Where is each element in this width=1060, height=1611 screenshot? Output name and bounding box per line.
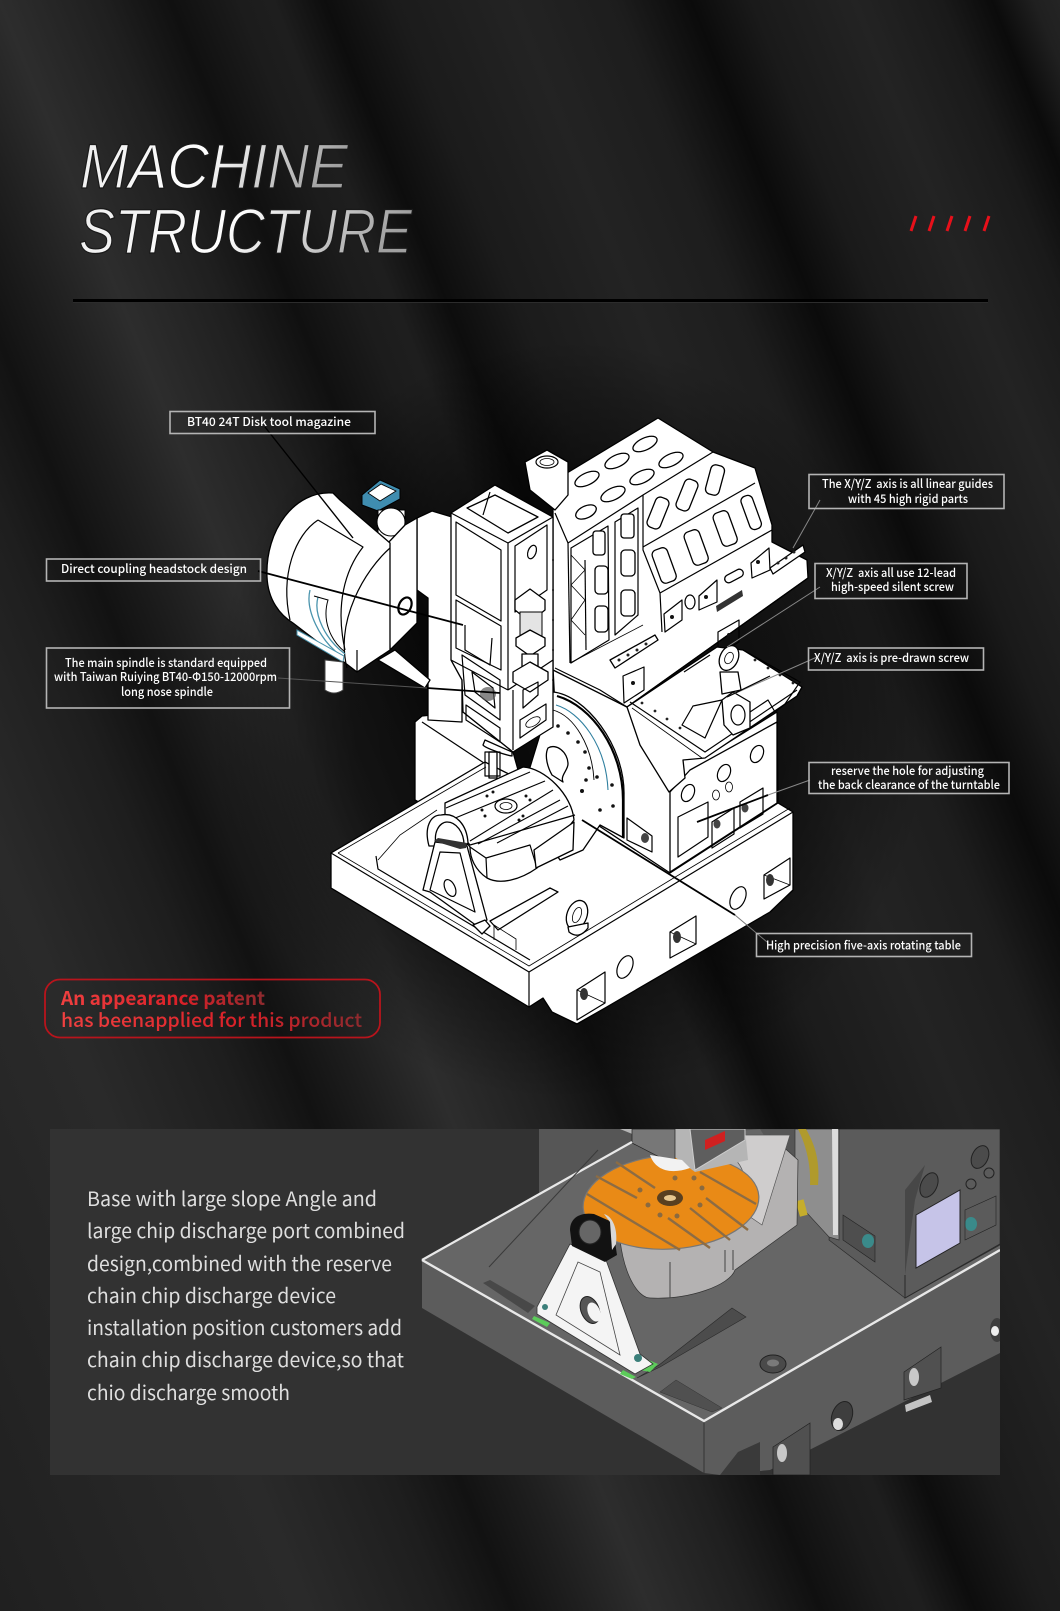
label: headstock: Direct coupling headstock design [61, 560, 247, 577]
lower front bed and motor bracket [627, 642, 802, 792]
green bolts [542, 1304, 548, 1310]
tailstock head [570, 1214, 617, 1262]
panel: base chip discharge [50, 1129, 1004, 1475]
icon: red slashes [911, 216, 989, 231]
purple access plate [916, 1190, 960, 1268]
panel CAD render [422, 1129, 1004, 1475]
patent callout [45, 980, 380, 1038]
label: rotating table: High precision five-axis rotating table [766, 936, 961, 954]
tray floor [422, 1129, 1000, 1420]
spindle tip [483, 740, 512, 778]
label: main spindle [46, 648, 290, 708]
machine line drawing [258, 418, 820, 1024]
rear wall [539, 1129, 829, 1238]
leader lines [258, 427, 820, 942]
panel text: chain chip discharge device [87, 1280, 336, 1309]
magazine motor [362, 480, 400, 511]
floor puck [760, 1355, 786, 1373]
guide rod [325, 660, 343, 693]
panel text: large chip discharge port combined [87, 1215, 405, 1244]
panel text: chain chip discharge device,so that [87, 1344, 404, 1373]
pockets and holes [577, 972, 605, 1020]
linear guide segments [610, 545, 805, 668]
tailstock support [423, 815, 490, 934]
back pedestal [829, 1129, 1000, 1298]
top slots [573, 433, 685, 522]
patent callout: has beenapplied for this product [61, 1006, 362, 1033]
upright disc back [795, 1129, 839, 1240]
label: rotating table [756, 934, 972, 956]
side housing behind column [417, 511, 462, 722]
label: silent screw [815, 564, 967, 598]
title: STRUCTURE [79, 197, 413, 267]
label: main spindle: with Taiwan Ruiying BT40-Φ150-12000rpm [54, 668, 277, 685]
label: linear guides [809, 474, 1004, 508]
label: main spindle: The main spindle is standard equipped [65, 654, 267, 671]
rear bed block [553, 668, 778, 873]
orange table [582, 1156, 760, 1250]
machine column [451, 450, 568, 752]
ribbed side panels [571, 508, 638, 663]
tool magazine [267, 480, 430, 693]
base tray [331, 762, 793, 1024]
label: main spindle: long nose spindle [121, 683, 213, 700]
chip ramp [637, 1308, 746, 1378]
title divider [73, 299, 988, 303]
panel text: installation position customers add [87, 1312, 402, 1341]
rotary disc [520, 692, 624, 860]
panel text: chio discharge smooth [87, 1377, 290, 1406]
label: linear guides: with 45 high rigid parts [848, 490, 968, 507]
upper side windows [646, 464, 763, 585]
label: back clearance: reserve the hole for adjusting [831, 762, 984, 779]
lower side pockets [623, 548, 770, 703]
label: linear guides: The X/Y/Z axis is all linear guides [822, 475, 993, 492]
rotary table [445, 767, 575, 881]
tray white rim [422, 1142, 632, 1260]
rotary table housing [620, 1135, 798, 1298]
spindle windows [462, 655, 500, 720]
drum [267, 493, 390, 672]
door bracket [309, 590, 345, 655]
label: BT40 tool magazine [170, 412, 375, 434]
tray side faces [422, 1250, 1000, 1475]
label: pre-drawn screw: X/Y/Z axis is pre-drawn screw [814, 649, 969, 666]
panel text [87, 1183, 405, 1406]
label: BT40 tool magazine: BT40 24T Disk tool magazine [187, 413, 351, 430]
patent callout: An appearance patent [60, 984, 265, 1011]
white tailstock [537, 1244, 653, 1374]
title: MACHINE [80, 132, 349, 202]
panel text: design,combined with the reserve [87, 1248, 392, 1277]
tray lifting eye [562, 897, 592, 933]
left pedestal block [415, 712, 525, 830]
label: back clearance: the back clearance of the turntable [818, 776, 1000, 793]
label: silent screw: high-speed silent screw [831, 578, 954, 595]
machine column above [620, 1129, 748, 1172]
panel text: Base with large slope Angle and [87, 1183, 377, 1212]
rear pedestal details [627, 722, 777, 872]
green pads [532, 1316, 550, 1327]
label: silent screw: X/Y/Z axis all use 12-lead [826, 564, 956, 581]
front side pockets [904, 1347, 941, 1400]
upper saddle [553, 418, 808, 707]
cylinder assembly [515, 589, 545, 622]
label: headstock [46, 559, 260, 581]
title [79, 132, 413, 267]
label: back clearance [809, 762, 1009, 794]
